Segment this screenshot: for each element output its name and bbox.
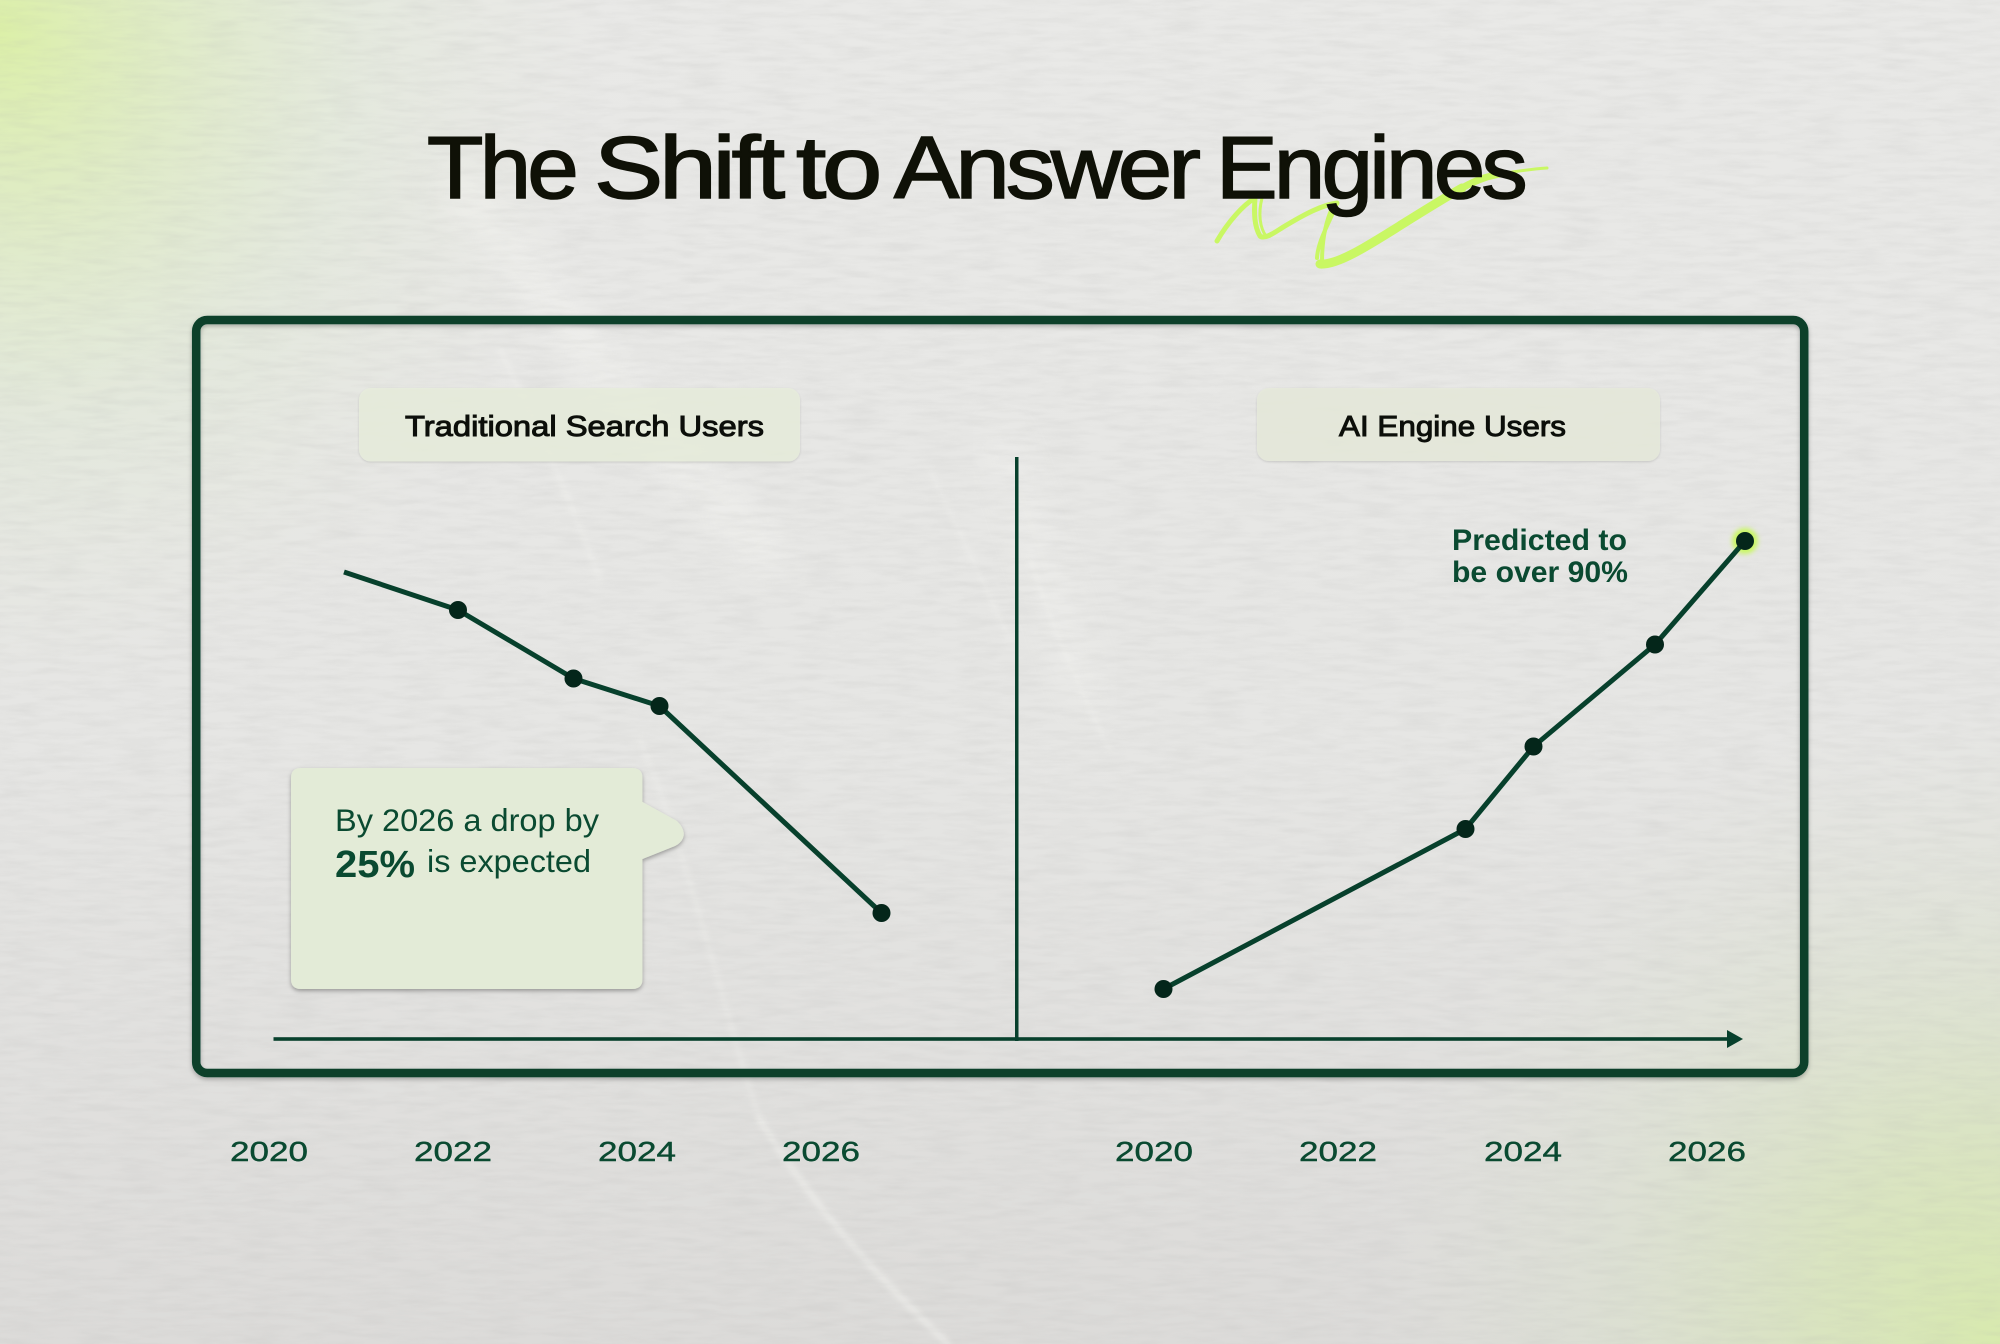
year labels: right chart: 2022 bbox=[1299, 1136, 1377, 1167]
line chart: AI engine users bbox=[1154, 528, 1758, 998]
callout: drop by 25%: By 2026 a drop by bbox=[335, 802, 599, 838]
year labels: left chart: 2024 bbox=[598, 1136, 676, 1167]
chart frame panel bbox=[196, 320, 1804, 1073]
callout: drop by 25%: 25% bbox=[335, 844, 415, 886]
callout: drop by 25% bbox=[291, 768, 684, 989]
year labels: left chart bbox=[230, 1136, 860, 1167]
title: Answer bbox=[894, 118, 1199, 217]
annotation: predicted to be over 90% bbox=[1452, 524, 1628, 589]
title: Shift bbox=[594, 118, 785, 217]
title bbox=[427, 118, 1525, 217]
year labels: left chart: 2026 bbox=[782, 1136, 860, 1167]
title: The bbox=[427, 118, 576, 217]
title: to bbox=[796, 118, 879, 217]
annotation: predicted to be over 90%: be over 90% bbox=[1452, 556, 1628, 589]
annotation: predicted to be over 90%: Predicted to bbox=[1452, 524, 1627, 557]
callout: drop by 25%: is expected bbox=[427, 843, 591, 879]
title: Engines bbox=[1216, 118, 1525, 217]
year labels: right chart: 2024 bbox=[1484, 1136, 1562, 1167]
year labels: right chart: 2026 bbox=[1668, 1136, 1746, 1167]
pill label: traditional search users: Traditional Search Users bbox=[405, 411, 764, 443]
line chart: traditional search users bbox=[344, 572, 890, 922]
year labels: right chart: 2020 bbox=[1115, 1136, 1193, 1167]
year labels: right chart bbox=[1115, 1136, 1746, 1167]
pill label: AI engine users: AI Engine Users bbox=[1339, 411, 1566, 443]
year labels: left chart: 2022 bbox=[414, 1136, 492, 1167]
pill label: AI engine users bbox=[1257, 388, 1660, 461]
x axis arrow bbox=[274, 1030, 1743, 1048]
pill label: traditional search users bbox=[359, 388, 800, 462]
year labels: left chart: 2020 bbox=[230, 1136, 308, 1167]
vertical divider bbox=[1015, 457, 1018, 1041]
scribble underline behind title bbox=[1217, 168, 1547, 264]
